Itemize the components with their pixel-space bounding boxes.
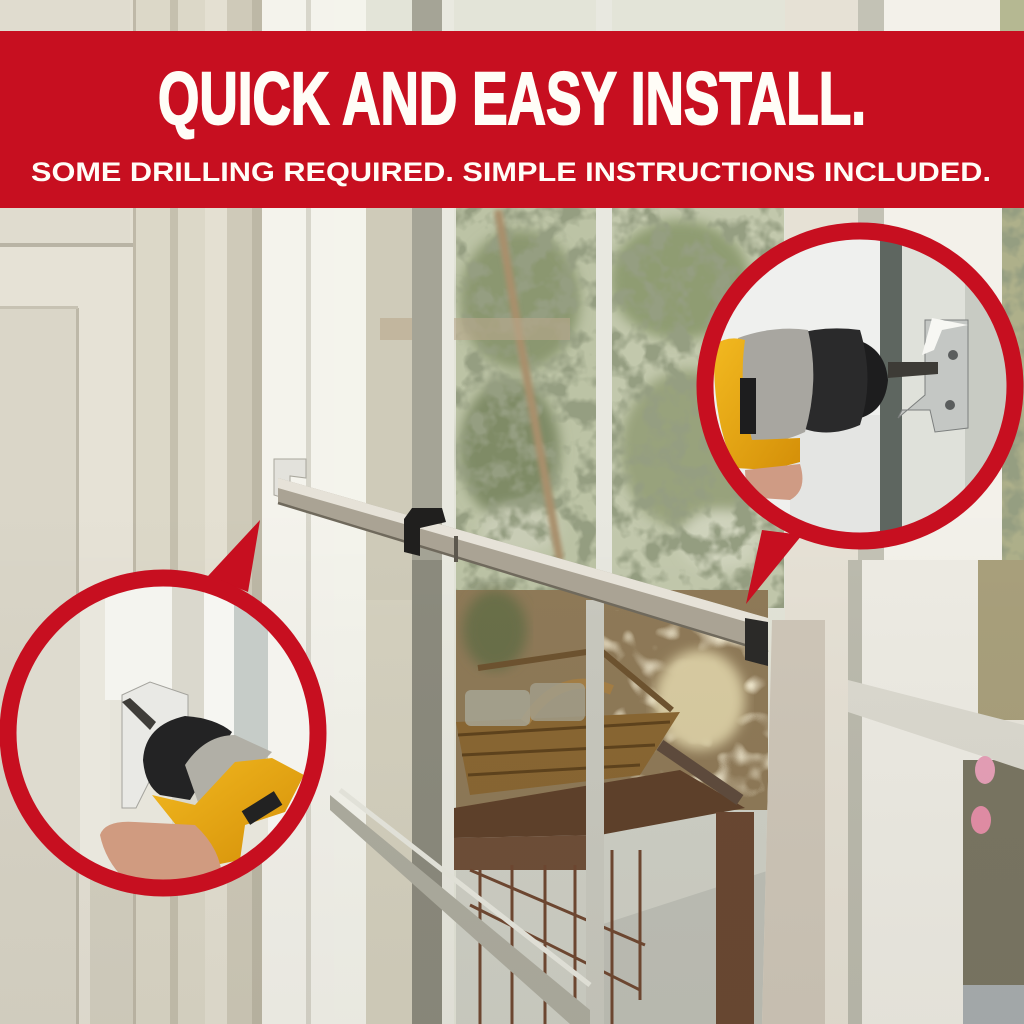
icon: metal bracket <box>122 682 188 808</box>
bar body <box>278 478 768 652</box>
callout: drilling upper bracket <box>700 230 1024 541</box>
red pointer bottom left <box>208 520 260 592</box>
subtitle: SOME DRILLING REQUIRED. SIMPLE INSTRUCTIONS INCLUDED. <box>31 157 991 187</box>
left mounting bracket <box>274 459 306 500</box>
icon: drill <box>714 328 938 500</box>
glass panes <box>334 0 790 1024</box>
red pointer top right <box>746 530 802 604</box>
icon: metal bracket <box>898 318 968 432</box>
security bar <box>274 459 768 666</box>
center latch <box>404 508 446 556</box>
wall trim <box>133 0 268 1024</box>
table <box>454 745 754 1024</box>
cabinet door <box>0 0 148 1024</box>
window muntins <box>330 0 612 1024</box>
banner <box>0 31 1024 208</box>
right frame <box>762 0 1024 1024</box>
window frame left <box>262 0 334 1024</box>
tree trunk <box>498 210 560 560</box>
lower shading <box>0 500 1024 1024</box>
interior reflection band <box>380 318 570 340</box>
right end cap <box>745 618 768 666</box>
callout: drilling lower bracket <box>0 570 328 900</box>
basket <box>456 650 680 795</box>
foliage <box>456 208 1024 718</box>
icon: drill <box>100 698 304 880</box>
lower garden and wall <box>366 590 770 1024</box>
